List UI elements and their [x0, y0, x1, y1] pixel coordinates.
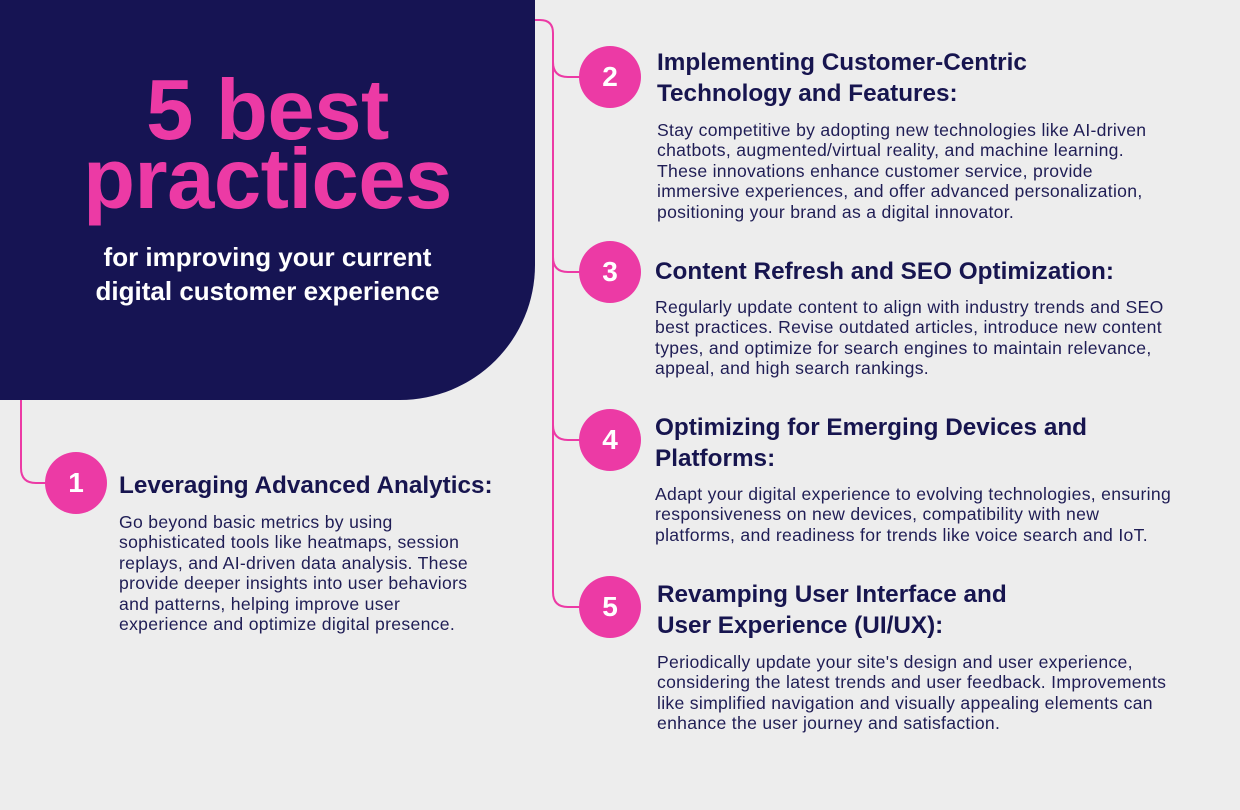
- item 1: [45, 452, 493, 634]
- text 3: [655, 297, 1164, 378]
- title: practices: [83, 132, 452, 227]
- text 2: Stay competitive by adopting new technologies like AI-driven: [657, 120, 1146, 140]
- subtitle: for improving your current: [104, 242, 431, 272]
- text 4: responsiveness on new devices, compatibility with new: [655, 504, 1099, 524]
- text 1: sophisticated tools like heatmaps, session: [119, 532, 459, 552]
- text 3: appeal, and high search rankings.: [655, 358, 929, 378]
- text 3: Regularly update content to align with industry trends and SEO: [655, 297, 1164, 317]
- text 4: platforms, and readiness for trends like voice search and IoT.: [655, 525, 1148, 545]
- item 2: [579, 46, 1146, 222]
- text 1: and patterns, helping improve user: [119, 594, 400, 614]
- text 1: provide deeper insights into user behaviors: [119, 573, 467, 593]
- text 2: positioning your brand as a digital innovator.: [657, 202, 1014, 222]
- heading 5: [657, 581, 1007, 639]
- heading 2: Technology and Features:: [657, 80, 958, 107]
- text 5: [657, 652, 1166, 733]
- icon: number 2: 2: [602, 61, 618, 92]
- text 4: Adapt your digital experience to evolving technologies, ensuring: [655, 484, 1171, 504]
- heading 3: Content Refresh and SEO Optimization:: [655, 258, 1114, 285]
- icon: number 5: 5: [602, 591, 618, 622]
- subtitle: [96, 242, 439, 306]
- heading 5: Revamping User Interface and: [657, 581, 1007, 608]
- icon: number 3: 3: [602, 256, 618, 287]
- text 5: like simplified navigation and visually appealing elements can: [657, 693, 1153, 713]
- item 5: [579, 576, 1166, 733]
- title: 5 best: [146, 63, 389, 158]
- icon: number 3: [579, 241, 641, 303]
- text 5: considering the latest trends and user feedback. Improvements: [657, 672, 1166, 692]
- heading 5: User Experience (UI/UX):: [657, 612, 943, 639]
- text 2: immersive experiences, and offer advanced personalization,: [657, 181, 1143, 201]
- text 5: Periodically update your site's design and user experience,: [657, 652, 1133, 672]
- text 2: [657, 120, 1146, 222]
- icon: number 2: [579, 46, 641, 108]
- heading 4: Platforms:: [655, 445, 775, 472]
- text 2: chatbots, augmented/virtual reality, and machine learning.: [657, 140, 1124, 160]
- heading 4: Optimizing for Emerging Devices and: [655, 414, 1087, 441]
- text 1: experience and optimize digital presence.: [119, 614, 455, 634]
- text 1: replays, and AI-driven data analysis. These: [119, 553, 468, 573]
- icon: number 1: [45, 452, 107, 514]
- heading 4: [655, 414, 1087, 472]
- item 3: [579, 241, 1164, 378]
- icon: number 4: [579, 409, 641, 471]
- subtitle: digital customer experience: [96, 276, 439, 306]
- item 4: [579, 409, 1171, 545]
- heading 2: [657, 49, 1027, 107]
- text 1: Go beyond basic metrics by using: [119, 512, 393, 532]
- icon: number 4: 4: [602, 424, 618, 455]
- text 3: types, and optimize for search engines to maintain relevance,: [655, 338, 1152, 358]
- text 4: [655, 484, 1171, 545]
- panel: header: [0, 0, 535, 400]
- text 5: enhance the user journey and satisfaction.: [657, 713, 1000, 733]
- text 2: These innovations enhance customer service, provide: [657, 161, 1093, 181]
- icon: number 1: 1: [68, 467, 84, 498]
- title: [83, 63, 452, 227]
- text 1: [119, 512, 468, 634]
- heading 1: Leveraging Advanced Analytics:: [119, 472, 493, 499]
- heading 2: Implementing Customer-Centric: [657, 49, 1027, 76]
- text 3: best practices. Revise outdated articles, introduce new content: [655, 317, 1162, 337]
- icon: number 5: [579, 576, 641, 638]
